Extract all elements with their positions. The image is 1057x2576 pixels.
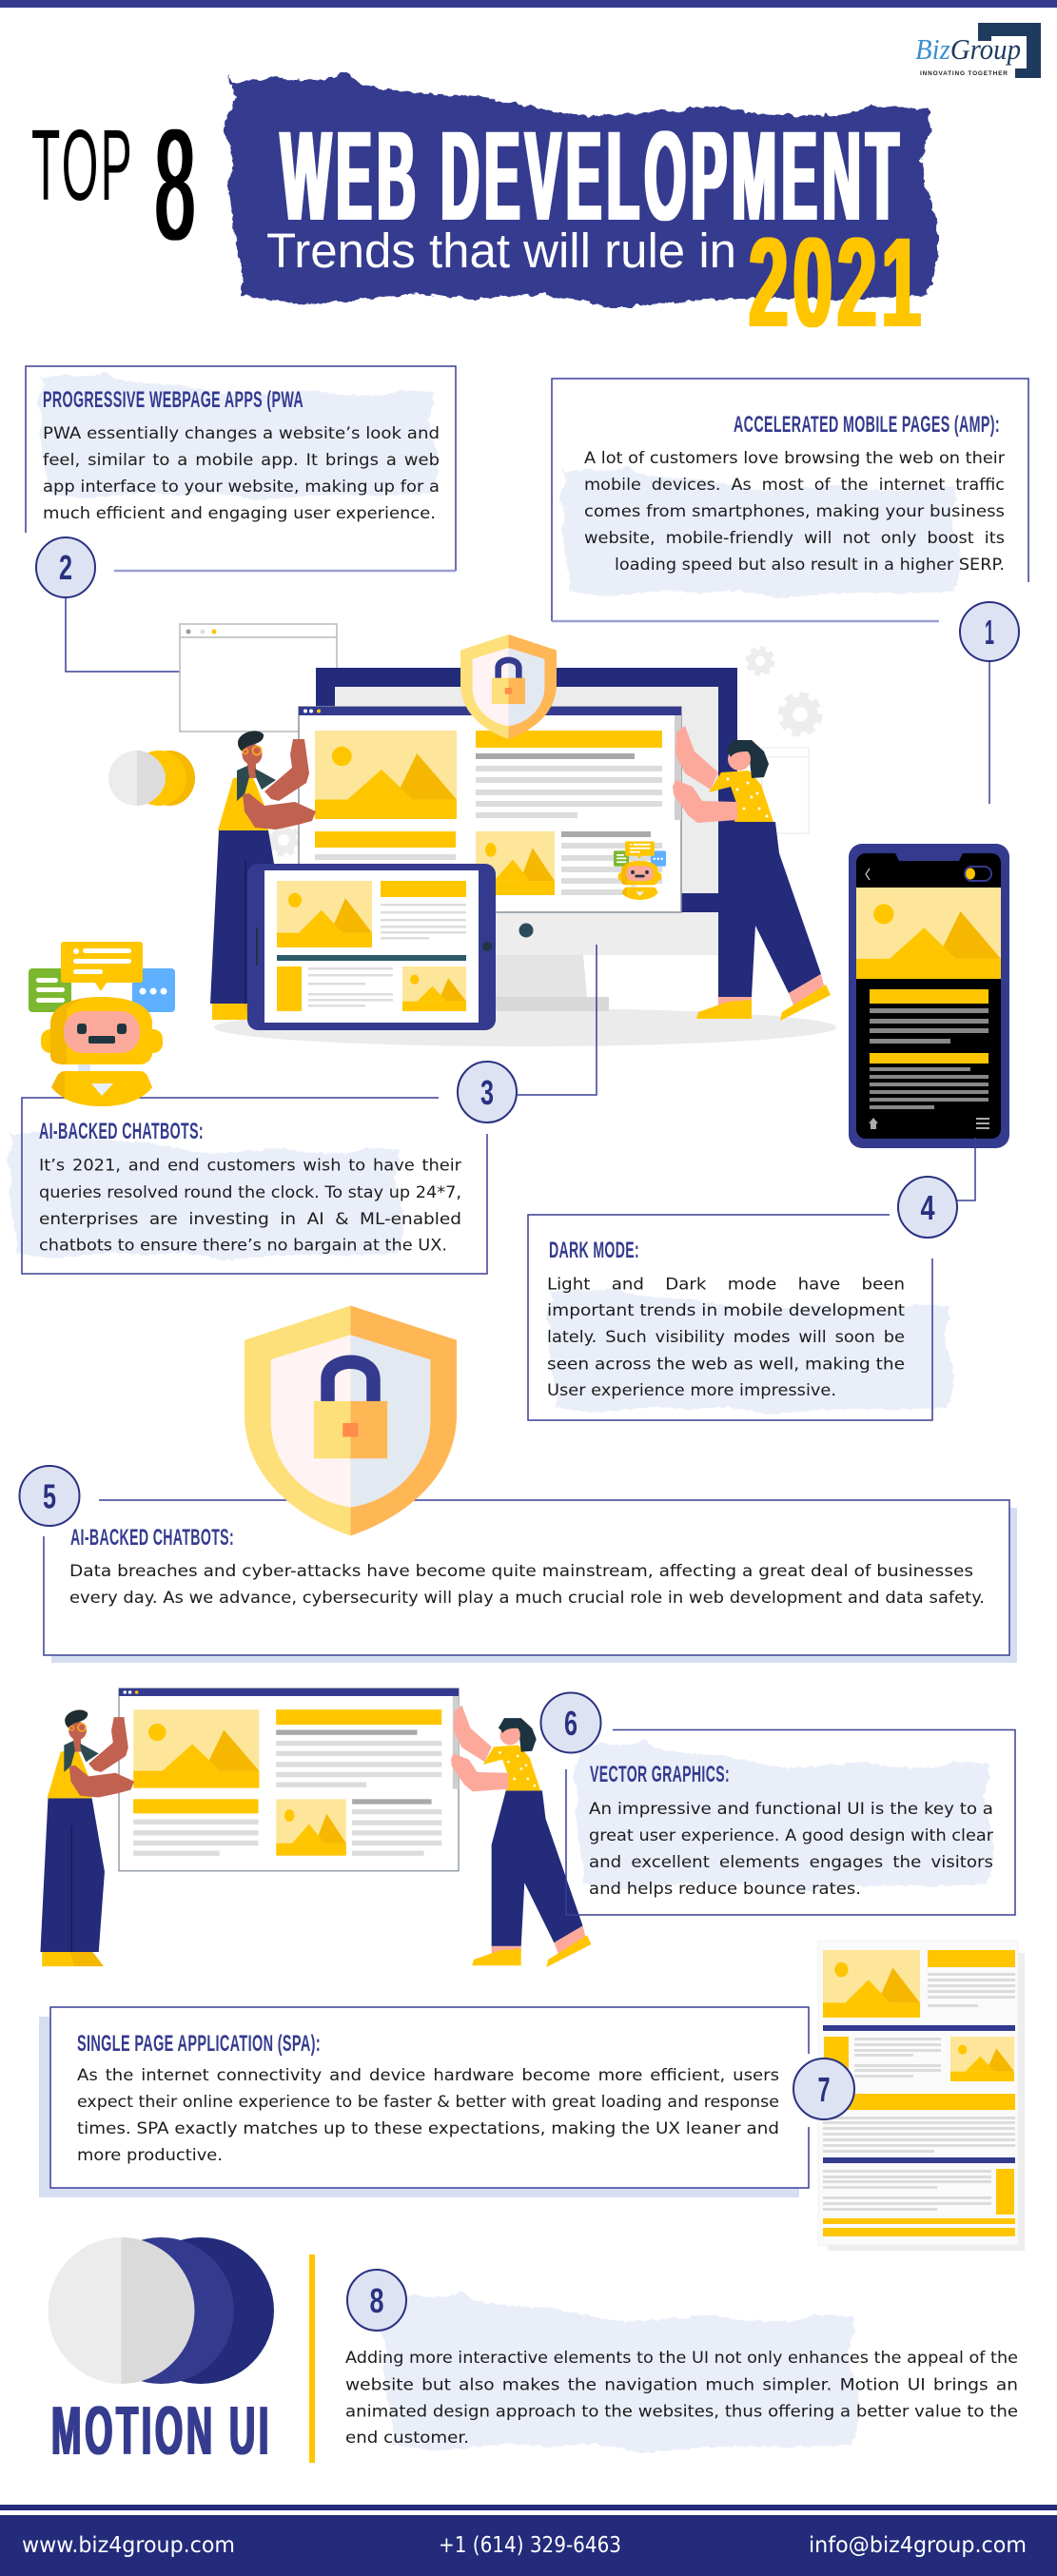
panel: progressive webpage apps — [26, 366, 456, 571]
footer — [0, 2505, 1057, 2576]
panel: accelerated mobile pages: loading speed but also result in a higher SERP. — [615, 556, 1005, 574]
phone in dark mode — [849, 844, 1009, 1148]
panel: vector graphics: An impressive and functional UI is the key to a — [589, 1800, 993, 1818]
panel: ai-backed chatbots: It’s 2021, and end customers wish to have their — [39, 1157, 461, 1174]
icon: motion circles — [49, 2237, 274, 2384]
panel: accelerated mobile pages: mobile devices. As most of the internet traffic — [584, 476, 1005, 494]
panel: accelerated mobile pages — [552, 379, 1028, 621]
panel: vector graphics: and helps reduce bounce rates. — [589, 1880, 861, 1898]
panel: cybersecurity: Data breaches and cyber-attacks have become quite mainstream, affecting a great deal of businesses — [69, 1562, 973, 1580]
panel: motion ui text: website but also makes the navigation much simpler. Motion UI brings an — [345, 2376, 1018, 2393]
panel: single page application: times. SPA exactly matches up to these expectations, making the UX leaner and — [77, 2119, 779, 2137]
icon: gears and faint window — [270, 649, 818, 853]
logo: INNOVATING TOGETHER — [920, 70, 1008, 77]
footer: info@biz4group.com — [809, 2533, 1027, 2558]
number 3 with connector — [458, 945, 597, 1122]
tablet — [247, 864, 496, 1030]
heading: motion ui: MOTION UI — [51, 2393, 272, 2469]
panel: single page application: SINGLE PAGE APPLICATION (SPA): — [77, 2031, 321, 2057]
panel: progressive webpage apps: much efficient and engaging user experience. — [43, 504, 436, 522]
hero illustration: faint background window — [180, 624, 337, 732]
panel: dark mode: User experience more impressive. — [547, 1381, 836, 1399]
small robot in browser — [614, 841, 666, 900]
divider bar — [309, 2254, 315, 2463]
panel: accelerated mobile pages: A lot of customers love browsing the web on their — [584, 449, 1005, 467]
panel: cybersecurity: every day. As we advance, cybersecurity will play a much crucial role in web development and data safety. — [69, 1589, 985, 1607]
title: top 8 — [31, 97, 195, 272]
icon: large shield — [245, 1305, 457, 1535]
number 7 — [793, 2059, 854, 2119]
footer: +1 (614) 329-6463 — [439, 2533, 621, 2558]
panel: motion ui text: animated design approach to the websites, thus offering a better value to the — [345, 2403, 1018, 2421]
number 2 with connector: 2 — [59, 548, 72, 587]
panel: ai-backed chatbots: enterprises are investing in AI & ML-enabled — [39, 1210, 461, 1228]
number 1 with connector — [960, 602, 1019, 804]
panel: vector graphics: great user experience. A good design with clear — [589, 1826, 993, 1844]
panel: dark mode: important trends in mobile development — [547, 1301, 906, 1319]
icon: small shield — [460, 634, 557, 739]
panel: vector graphics — [566, 1729, 1015, 1915]
monitor — [214, 668, 836, 1046]
browser window — [299, 707, 681, 912]
number 6: 6 — [564, 1704, 577, 1743]
number 4 with connector: 4 — [921, 1188, 934, 1227]
number 8: 8 — [369, 2281, 384, 2320]
number 3 with connector: 3 — [480, 1073, 494, 1112]
panel: progressive webpage apps: PWA essentially changes a website’s look and — [43, 424, 440, 442]
footer: www.biz4group.com — [22, 2533, 235, 2558]
number 2 with connector — [36, 537, 180, 672]
panel: ai-backed chatbots: AI-BACKED CHATBOTS: — [39, 1119, 204, 1144]
text: 8 — [155, 97, 195, 272]
top bar — [0, 0, 1057, 8]
title banner: torn blue shape — [224, 72, 939, 308]
logo: BizGroup — [915, 32, 1021, 66]
number 6 — [540, 1693, 601, 1752]
panel: dark mode: lately. Such visibility modes will soon be — [547, 1328, 905, 1346]
people holding browser — [210, 726, 831, 1021]
panel: dark mode: Light and Dark mode have been — [547, 1275, 905, 1294]
panel: single page application: expect their online experience to be faster & better with great loading and response — [77, 2093, 779, 2111]
icon: toggle circles — [108, 751, 195, 806]
panel: single page application: As the internet connectivity and device hardware become more efficient, users — [77, 2066, 779, 2084]
panel: accelerated mobile pages: website, mobile-friendly will not only boost its — [584, 529, 1005, 547]
number 5: 5 — [43, 1476, 56, 1516]
number 7: 7 — [818, 2070, 830, 2109]
panel: ai-backed chatbots: chatbots to ensure there’s no bargain at the UX. — [39, 1237, 447, 1254]
icon: chatbot robot — [29, 942, 175, 1106]
panel: accelerated mobile pages: comes from smartphones, making your business — [584, 502, 1005, 520]
title: trends line: Trends that will rule in — [266, 224, 736, 278]
panel: vector graphics: and excellent elements engages the visitors — [589, 1853, 993, 1871]
panel: ai-backed chatbots — [7, 1098, 487, 1274]
number 8 — [347, 2270, 406, 2331]
panel: vector graphics: VECTOR GRAPHICS: — [590, 1762, 730, 1787]
panel: dark mode: seen across the web as well, making the — [547, 1355, 905, 1374]
panel: progressive webpage apps: feel, similar to a mobile app. It brings a web — [43, 451, 440, 469]
panel: ai-backed chatbots: queries resolved round the clock. To stay up 24*7, — [39, 1183, 461, 1201]
panel: single page application — [39, 2007, 809, 2197]
vector graphics illustration — [40, 1688, 591, 1967]
panel: motion ui text: end customer. — [345, 2429, 469, 2447]
number 5 — [19, 1466, 80, 1526]
number 1 with connector: 1 — [985, 613, 994, 652]
number 4 with connector — [898, 1138, 975, 1238]
panel: single page application: more productive. — [77, 2146, 223, 2164]
document illustration — [818, 1941, 1025, 2251]
panel: dark mode: DARK MODE: — [549, 1238, 639, 1263]
panel: dark mode — [528, 1215, 954, 1420]
logo — [915, 23, 1041, 78]
title: top 8: TOP — [31, 109, 134, 222]
panel: motion ui text — [345, 2292, 1018, 2453]
panel: motion ui text: Adding more interactive elements to the UI not only enhances the appeal of the — [345, 2349, 1018, 2367]
panel: cybersecurity: AI-BACKED CHATBOTS: — [70, 1525, 234, 1551]
panel: progressive webpage apps: app interface to your website, making up for a — [43, 478, 440, 496]
panel: progressive webpage apps: PROGRESSIVE WEBPAGE APPS (PWA — [43, 387, 303, 413]
panel: cybersecurity — [44, 1500, 1017, 1663]
